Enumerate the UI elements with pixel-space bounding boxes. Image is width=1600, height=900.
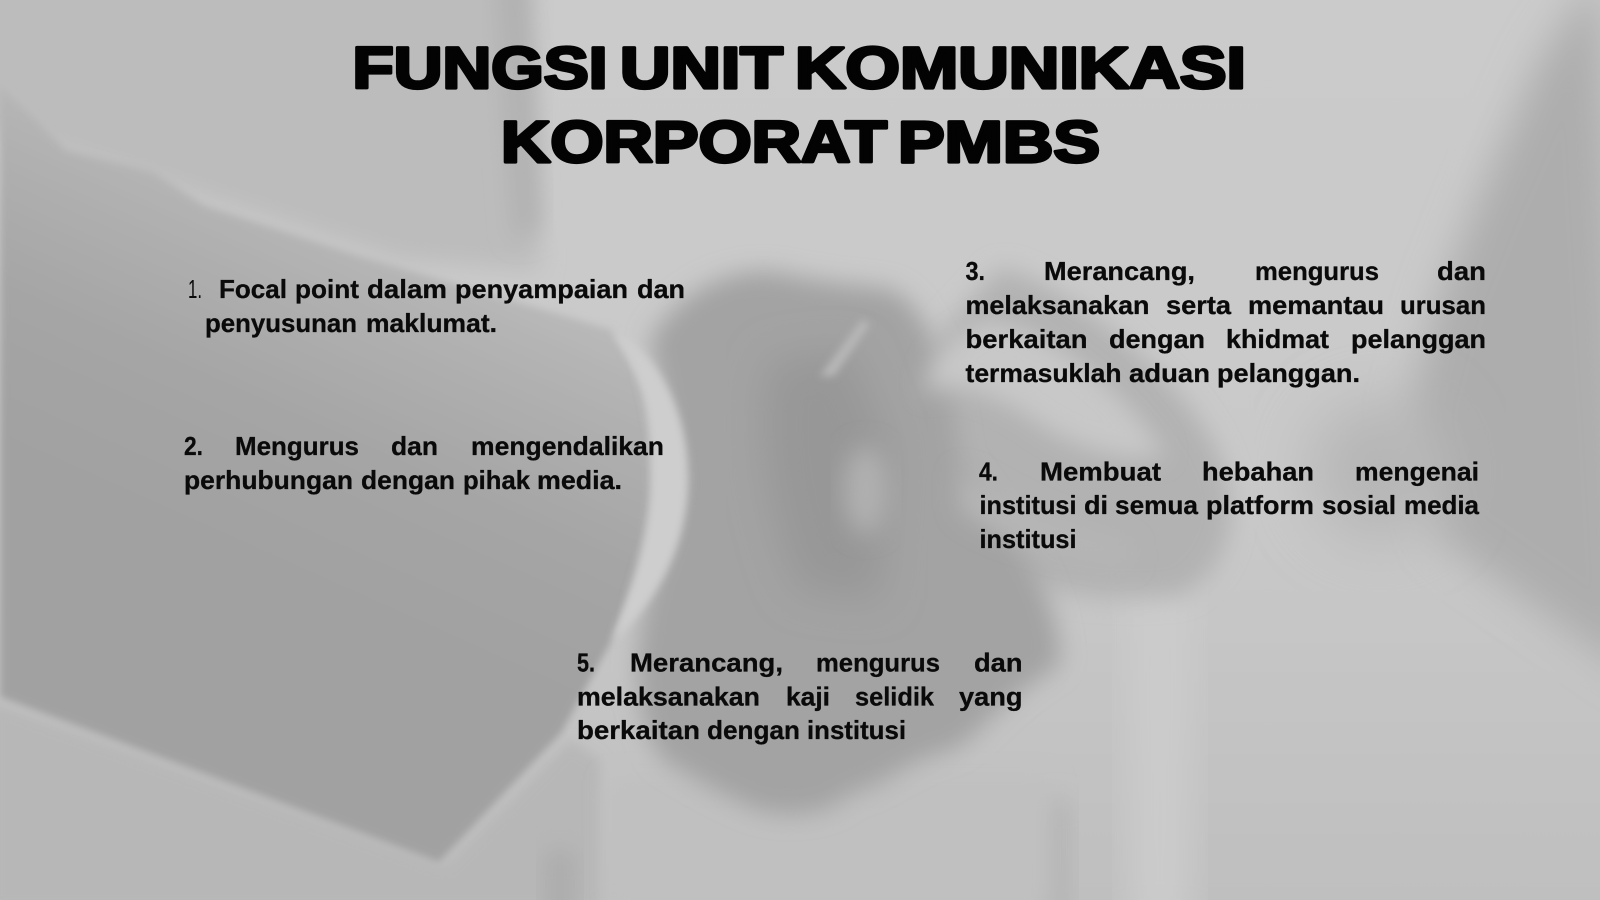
text block: item 2: dan <box>391 431 438 461</box>
text block: item 3: dengan <box>1109 324 1205 354</box>
text block: item 5 <box>577 648 1022 745</box>
text block: item 3 <box>966 256 1486 388</box>
title: KOMUNIKASI <box>795 36 1246 101</box>
text block: item 3: berkaitan <box>966 324 1088 354</box>
text block: item 4: hebahan <box>1202 456 1314 486</box>
text block: item 2: Mengurus <box>235 431 359 461</box>
text block: item 5: kaji <box>786 682 830 712</box>
title: PMBS <box>898 110 1100 175</box>
text block: item 4: semua <box>1115 490 1199 520</box>
text block: item 3: dan <box>1437 256 1486 286</box>
text block: item 1: Focal <box>219 274 287 304</box>
fingernail highlight <box>844 446 888 534</box>
text block: item 1 <box>188 274 685 338</box>
text block: item 2: perhubungan <box>184 465 353 495</box>
text block: item 3: Merancang, <box>1044 256 1195 286</box>
text block: item 3: melaksanakan <box>966 290 1150 320</box>
text block: item 1: 1. <box>188 274 202 304</box>
title: KORPORAT <box>501 110 887 175</box>
right hand <box>880 268 1231 598</box>
text block: item 2: dengan <box>361 465 455 495</box>
text block: item 3: termasuklah <box>966 358 1122 388</box>
text block: item 4: sosial <box>1322 490 1396 520</box>
text block: item 4 <box>979 456 1480 554</box>
text block: item 5: yang <box>959 682 1022 712</box>
text block: item 3: pelanggan. <box>1217 358 1360 388</box>
text block: item 4: institusi <box>980 490 1076 520</box>
text block: item 5: Merancang, <box>630 648 783 678</box>
text block: item 3: memantau <box>1248 290 1384 320</box>
text block: item 3: aduan <box>1129 358 1210 388</box>
text block: item 2: media. <box>537 465 622 495</box>
text block: item 4: media <box>1404 490 1480 520</box>
text block: item 1: dan <box>637 274 685 304</box>
text block: item 4: 4. <box>979 456 998 486</box>
title <box>352 36 1246 175</box>
text block: item 3: 3. <box>966 256 985 286</box>
text block: item 5: 5. <box>577 648 595 678</box>
thumb highlight <box>820 320 870 376</box>
text block: item 5: dengan <box>707 715 800 745</box>
text block: item 2: mengendalikan <box>471 431 664 461</box>
text block: item 4: mengenai <box>1355 456 1479 486</box>
text block: item 1: penyampaian <box>455 274 628 304</box>
text block: item 2: 2. <box>184 431 203 461</box>
text block: item 2 <box>184 431 664 495</box>
shirt cuff <box>612 332 688 642</box>
text block: item 1: penyusunan <box>205 308 357 338</box>
text block: item 3: mengurus <box>1255 256 1379 286</box>
text block: item 4: institusi <box>980 524 1076 554</box>
text block: item 3: khidmat <box>1226 324 1329 354</box>
text block: item 1: dalam <box>367 274 447 304</box>
text block: item 5: selidik <box>855 682 935 712</box>
text block: item 4: platform <box>1206 490 1314 520</box>
text block: item 4: di <box>1084 490 1108 520</box>
text block: item 5: berkaitan <box>577 715 700 745</box>
text block: item 4: Membuat <box>1040 456 1161 486</box>
text block: item 5: mengurus <box>816 648 940 678</box>
text block: item 3: urusan <box>1400 290 1486 320</box>
fingers of right hand <box>925 320 1165 458</box>
text block: item 5: dan <box>974 648 1022 678</box>
left sleeve <box>0 86 690 862</box>
text block: item 5: institusi <box>807 715 906 745</box>
title: UNIT <box>620 36 783 101</box>
text block: item 2: pihak <box>463 465 531 495</box>
text block: item 1: point <box>295 274 359 304</box>
text block: item 1: maklumat. <box>366 308 497 338</box>
text block: item 5: melaksanakan <box>577 682 760 712</box>
text block: item 3: pelanggan <box>1351 324 1486 354</box>
title: FUNGSI <box>352 36 608 101</box>
text block: item 3: serta <box>1166 290 1232 320</box>
clasped hand <box>637 272 1060 814</box>
